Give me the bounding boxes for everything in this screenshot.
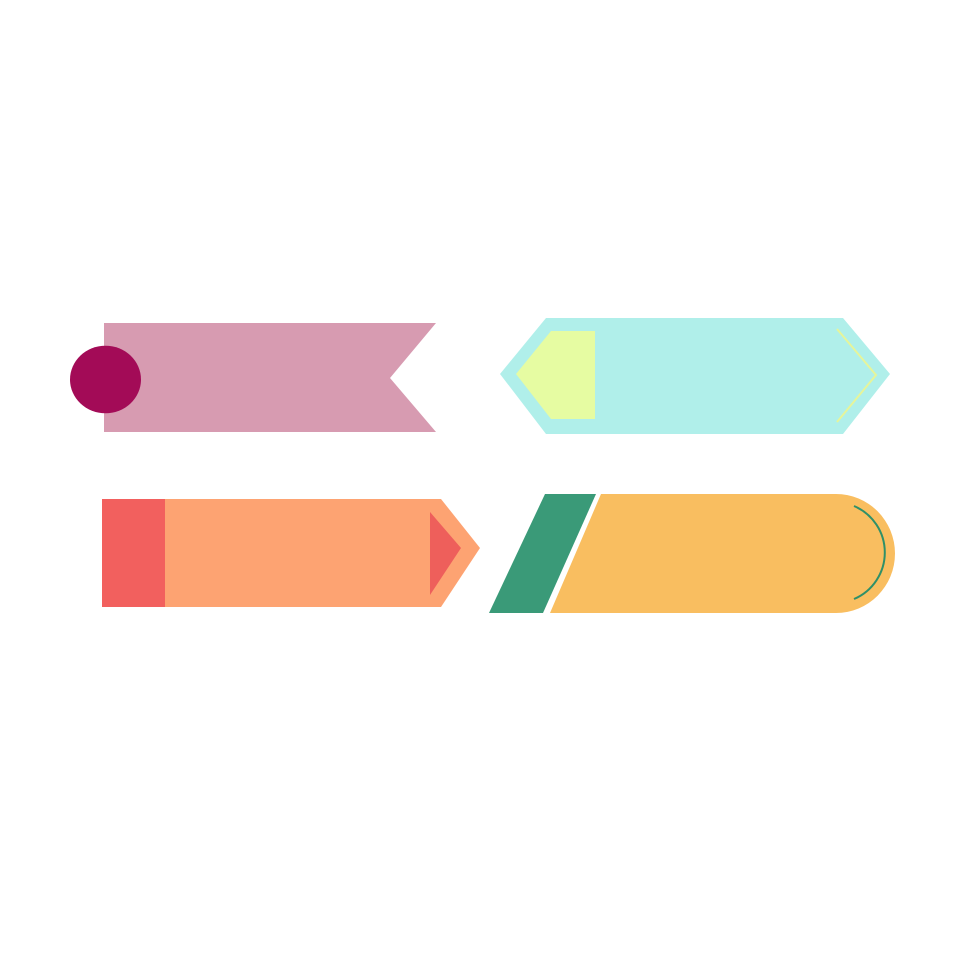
banner: orange arrow tag [102,499,480,607]
icon: pale yellow pentagon [516,331,595,419]
icon: green arc line [854,506,885,599]
banner: aqua hexagon [500,318,890,434]
banner: yellow rounded slanted [489,494,895,613]
icon: red triangle [430,512,461,595]
banner: pink ribbon with circle [70,323,436,432]
icon: magenta circle [70,346,141,413]
icon: red rectangle [102,499,165,607]
icon: yellow chevron line [837,329,876,422]
icon: green slanted bar [489,494,596,613]
